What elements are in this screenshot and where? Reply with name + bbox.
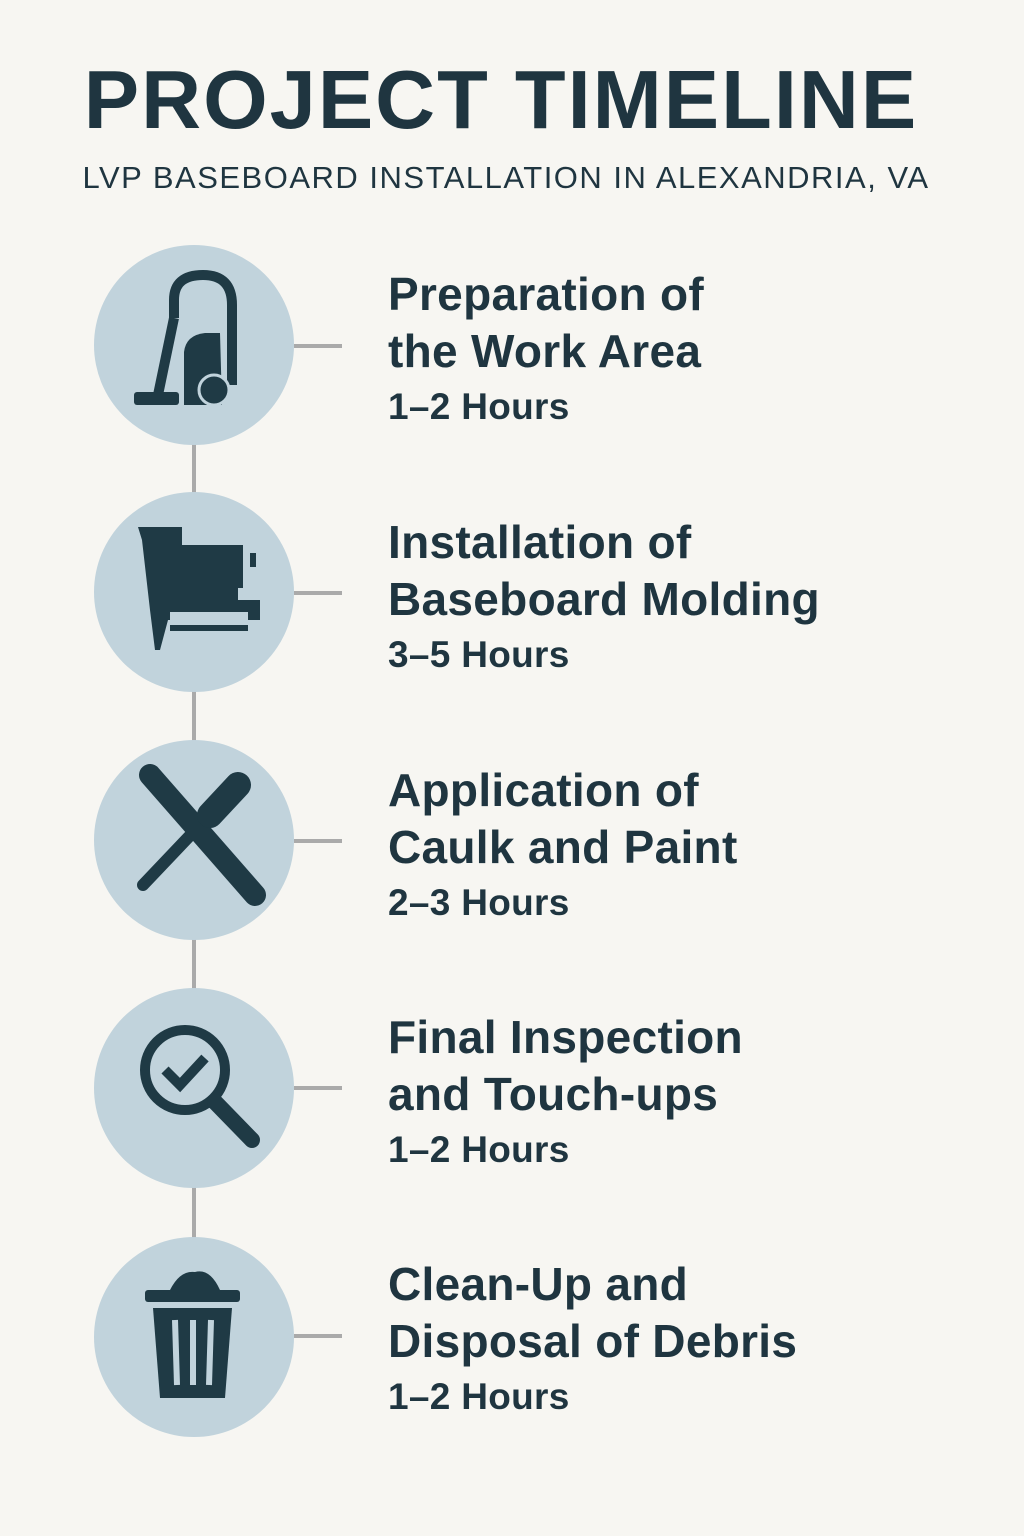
step 5: Disposal of Debris [388,1315,797,1367]
step 3: Caulk and Paint [388,821,738,873]
icon: caulk and brush [94,740,294,940]
step 4: 1–2 Hours [388,1129,570,1170]
icon: nail gun [94,492,294,692]
icon: magnifier check [94,988,294,1188]
step 2 [388,516,820,675]
subtitle: LVP BASEBOARD INSTALLATION IN ALEXANDRIA, VA [82,160,930,195]
step 2: 3–5 Hours [388,634,570,675]
step 1: the Work Area [388,325,701,377]
step 5: 1–2 Hours [388,1376,570,1417]
title: PROJECT TIMELINE [84,53,918,146]
timeline graphic [94,245,342,1437]
step 2: Baseboard Molding [388,573,820,625]
step 4 [388,1011,743,1170]
step 1: Preparation of [388,268,704,320]
step 5: Clean-Up and [388,1258,688,1310]
step 3 [388,764,738,923]
step 4: Final Inspection [388,1011,743,1063]
step 1: 1–2 Hours [388,386,570,427]
step 5 [388,1258,797,1417]
icon: trash bin [94,1237,294,1437]
step 4: and Touch-ups [388,1068,718,1120]
step 2: Installation of [388,516,692,568]
step 1 [388,268,704,427]
step 3: Application of [388,764,699,816]
icon: vacuum [94,245,294,445]
step 3: 2–3 Hours [388,882,570,923]
